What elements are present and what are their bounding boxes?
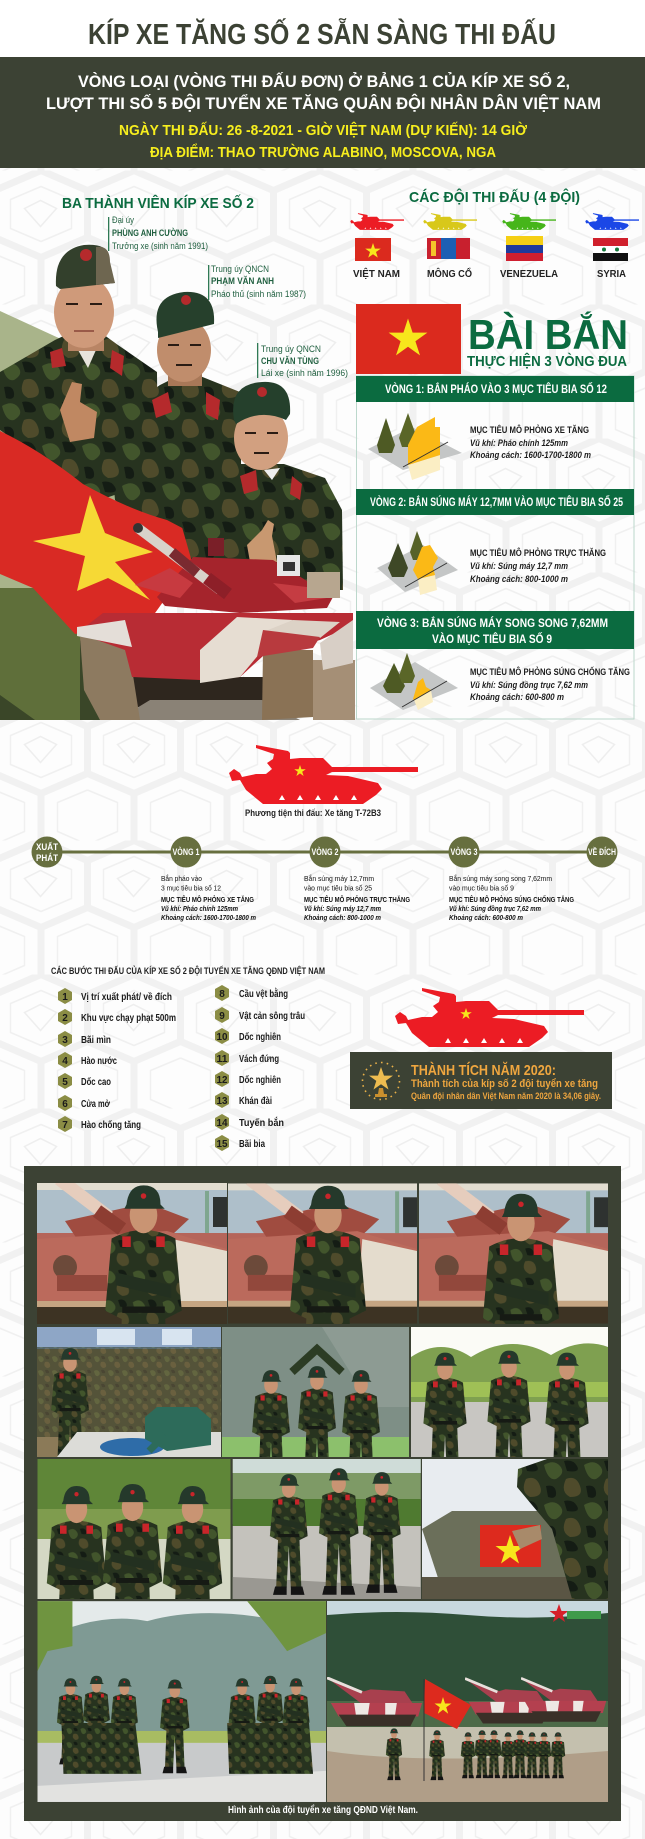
banner heading: LƯỢT THI SỐ 5 ĐỘI TUYỂN XE TĂNG QUÂN ĐỘI NHÂN DÂN VIỆT NAM	[46, 93, 601, 113]
steps list: column 2: 11	[216, 1054, 228, 1065]
achievement text: THÀNH TÍCH NĂM 2020:	[411, 1062, 556, 1079]
round 3 node: VÒNG 3	[450, 846, 478, 857]
team: Mongolia	[423, 213, 477, 280]
heading: competing teams: CÁC ĐỘI THI ĐẤU (4 ĐỘI)	[409, 188, 580, 206]
photo: three soldiers standing on road	[232, 1459, 421, 1599]
soldier 1: Phùng Anh Cường	[0, 245, 158, 500]
team: Vietnam	[350, 213, 404, 280]
timeline text: round 3	[449, 874, 574, 922]
timeline text: round 1: Vũ khí: Pháo chính 125mm	[161, 904, 238, 913]
round 1 text: Khoảng cách: 1600-1700-1800 m	[470, 450, 591, 461]
round 2 node: VÒNG 2	[312, 846, 338, 857]
tank photo	[77, 523, 355, 720]
timeline text: round 2: Vũ khí: Súng máy 12,7 mm	[304, 904, 381, 913]
title: KÍP XE TĂNG SỐ 2 SẴN SÀNG THI ĐẤU	[88, 16, 556, 51]
timeline text: round 1: 3 mục tiêu bia số 12	[161, 884, 221, 892]
soldier 2: Phạm Văn Anh	[108, 292, 242, 540]
crew label 3	[257, 343, 348, 379]
crew label 3: CHU VĂN TÙNG	[261, 355, 319, 367]
steps list: column 1: 7	[62, 1120, 68, 1131]
round 1 node: VÒNG 1	[172, 846, 200, 857]
team: Mongolia: MÔNG CỔ	[427, 267, 472, 280]
round 2 target illustration	[377, 531, 458, 595]
round 2 node	[310, 836, 340, 868]
steps list: column 2: Vách đứng	[239, 1054, 279, 1065]
steps list: column 2	[215, 985, 305, 1151]
photo: crew forming a house shape	[222, 1327, 409, 1457]
timeline text: round 1	[161, 874, 256, 922]
soldier 3: Chu Văn Tùng	[180, 382, 343, 590]
steps list: column 2: Dốc nghiên	[239, 1074, 281, 1086]
timeline text: round 2: Khoảng cách: 800-1000 m	[304, 913, 381, 922]
steps list: column 2: 9	[219, 1011, 225, 1022]
panel: shooting range	[356, 304, 634, 719]
heading: shooting range: BÀI BẮN	[468, 310, 628, 358]
photo: soldier placing flag on tank	[422, 1459, 608, 1599]
round 1 text	[470, 424, 591, 461]
round 2 header	[356, 489, 634, 515]
timeline text: round 2	[304, 874, 410, 922]
steps list: column 1: 5	[62, 1077, 68, 1088]
steps list: column 1	[58, 988, 176, 1132]
steps list: column 1: 3	[62, 1035, 68, 1046]
steps list: column 2: 10	[216, 1032, 228, 1043]
start node	[32, 836, 62, 868]
crew label 2: Pháo thủ (sinh năm 1987)	[211, 289, 306, 300]
Vietnamese flag	[0, 431, 207, 634]
finish node	[586, 836, 618, 868]
steps list: column 2: Khán đài	[239, 1096, 272, 1107]
timeline text: round 1: MỤC TIÊU MÔ PHỎNG XE TĂNG	[161, 895, 254, 904]
photo: crew member 3 with tank	[419, 1183, 608, 1324]
steps list: column 2: Tuyến bắn	[239, 1116, 284, 1129]
round 2 text	[470, 547, 606, 585]
vehicle caption: Phương tiện thi đấu: Xe tăng T-72B3	[245, 808, 381, 819]
timeline text: round 3: Vũ khí: Súng đồng trục 7,62 mm	[449, 904, 541, 913]
heading: crew members: BA THÀNH VIÊN KÍP XE SỐ 2	[62, 194, 254, 212]
crew photo composition	[0, 245, 355, 720]
achievement panel	[350, 1052, 612, 1109]
steps list: column 2: Vật cản sông trâu	[239, 1011, 305, 1022]
team: Syria	[585, 213, 639, 280]
photo: crew in front of trees	[411, 1327, 608, 1457]
steps list: column 2: 15	[216, 1139, 228, 1150]
T-72B3 tank silhouette	[229, 745, 418, 804]
round 3 target illustration	[370, 653, 458, 710]
timeline text: round 2: vào mục tiêu bia số 25	[304, 884, 372, 892]
steps list: column 1: Hào chống tăng	[81, 1119, 141, 1131]
round 3 text	[470, 666, 630, 703]
round 2 text: Khoảng cách: 800-1000 m	[470, 574, 568, 585]
start node: PHÁT	[36, 853, 58, 863]
heading: shooting range: THỰC HIỆN 3 VÒNG ĐUA	[467, 352, 627, 370]
round 3 header: VÀO MỤC TIÊU BIA SỐ 9	[432, 631, 552, 646]
steps list: column 1: Hào nước	[81, 1056, 117, 1067]
photo: team formation before mountain	[38, 1601, 326, 1802]
timeline text: round 3: MỤC TIÊU MÔ PHỎNG SÚNG CHỐNG TĂNG	[449, 894, 574, 904]
crew label 3: Lái xe (sinh năm 1996)	[261, 368, 348, 379]
round 3 text: Vũ khí: Súng đồng trục 7,62 mm	[470, 680, 588, 691]
date and venue: NGÀY THI ĐẤU: 26 -8-2021 - GIỜ VIỆT NAM (DỰ KIẾN): 14 GIỜ	[119, 121, 527, 139]
photo gallery panel	[24, 1166, 621, 1821]
crew label 1: PHÙNG ANH CƯỜNG	[112, 227, 188, 239]
header banner	[0, 57, 645, 168]
timeline text: round 3: vào mục tiêu bia số 9	[449, 884, 514, 892]
crew label 2	[208, 264, 306, 300]
banner heading	[46, 71, 601, 113]
finish node: VỀ ĐÍCH	[588, 847, 616, 857]
round 2 text: Vũ khí: Súng máy 12,7 mm	[470, 561, 568, 572]
steps list: column 2: 12	[216, 1075, 228, 1086]
timeline text: round 1: Bắn pháo vào	[161, 874, 202, 883]
steps list: column 1: Bãi mìn	[81, 1035, 111, 1046]
steps list: column 1: 2	[62, 1013, 68, 1024]
photo: crew member 1 with tank	[37, 1183, 227, 1324]
timeline text: round 2: Bắn súng máy 12,7mm	[304, 874, 374, 883]
start node: XUẤT	[36, 842, 58, 852]
steps list: column 2: 13	[216, 1096, 228, 1107]
timeline text: round 3: Bắn súng máy song song 7,62mm	[449, 874, 552, 883]
steps list: column 1: Khu vực chạy phạt 500m	[81, 1013, 176, 1024]
team: Syria: SYRIA	[597, 268, 626, 280]
steps list: column 1: 6	[62, 1099, 68, 1110]
timeline text: round 2: MỤC TIÊU MÔ PHỎNG TRỰC THĂNG	[304, 895, 410, 904]
steps list: column 1: Cửa mở	[81, 1099, 111, 1110]
timeline text: round 3: Khoảng cách: 600-800 m	[449, 913, 523, 922]
photo: classroom with tank model	[37, 1327, 221, 1457]
round 3 text: Khoảng cách: 600-800 m	[470, 692, 564, 703]
steps list: column 2: 14	[216, 1118, 228, 1129]
round 1 text: MỤC TIÊU MÔ PHỎNG XE TĂNG	[470, 424, 589, 436]
round 3 header	[356, 611, 634, 649]
round 1 header	[356, 376, 634, 402]
round 1 target illustration	[368, 413, 462, 480]
steps list: column 1: 1	[62, 992, 68, 1003]
achievement text: Thành tích của kíp số 2 đội tuyển xe tăng	[411, 1078, 598, 1090]
round 3 node	[448, 836, 480, 868]
crew label 1: Trưởng xe (sinh năm 1991)	[112, 241, 208, 252]
date and venue: ĐỊA ĐIỂM: THAO TRƯỜNG ALABINO, MOSCOVA, NGA	[150, 143, 496, 161]
round 1 node	[170, 836, 202, 868]
steps list: column 2: Dốc nghiên	[239, 1031, 281, 1043]
crew label 3: Trung úy QNCN	[261, 344, 321, 355]
second tank silhouette	[395, 988, 584, 1047]
crew label 1	[108, 215, 208, 252]
steps list: column 1: Dốc cao	[81, 1076, 111, 1088]
steps heading: CÁC BƯỚC THI ĐẤU CỦA KÍP XE SỐ 2 ĐỘI TUYỂN XE TĂNG QĐND VIỆT NAM	[51, 965, 325, 977]
steps list: column 1: 4	[62, 1056, 68, 1067]
crew label 2: PHẠM VĂN ANH	[211, 276, 274, 287]
crew label 1: Đại úy	[112, 215, 134, 226]
steps list: column 2: 8	[219, 989, 225, 1000]
crew label 2: Trung úy QNCN	[211, 264, 269, 275]
steps list: column 1: Vị trí xuất phát/ về đích	[81, 991, 172, 1003]
team: Vietnam: VIỆT NAM	[353, 267, 400, 280]
round 3 header: VÒNG 3: BẮN SÚNG MÁY SONG SONG 7,62MM	[377, 615, 608, 630]
icon: medal trophy	[362, 1062, 400, 1100]
round 1 text: Vũ khí: Pháo chính 125mm	[470, 438, 568, 449]
photo: three soldiers by a pond	[38, 1459, 230, 1599]
photo: crew member 2 with tank	[228, 1183, 417, 1324]
gallery caption: Hình ảnh của đội tuyển xe tăng QĐND Việt Nam.	[228, 1804, 418, 1816]
photo: flag parade with tanks	[327, 1601, 608, 1802]
achievement text: Quân đội nhân dân Việt Nam năm 2020 là 34,06 giây.	[411, 1091, 601, 1101]
round 2 text: MỤC TIÊU MÔ PHỎNG TRỰC THĂNG	[470, 547, 606, 559]
banner heading: VÒNG LOẠI (VÒNG THI ĐẤU ĐƠN) Ở BẢNG 1 CỦA KÍP XE SỐ 2,	[78, 71, 570, 91]
timeline text: round 1: Khoảng cách: 1600-1700-1800 m	[161, 913, 256, 922]
steps list: column 2: Bãi bia	[239, 1139, 265, 1150]
team: Venezuela	[500, 213, 558, 280]
steps list: column 2: Cầu vệt bằng	[239, 987, 288, 1000]
achievement text	[411, 1062, 601, 1101]
race timeline	[32, 836, 618, 868]
team: Venezuela: VENEZUELA	[500, 268, 558, 280]
date and venue	[119, 121, 527, 161]
Vietnam flag large	[356, 304, 461, 374]
